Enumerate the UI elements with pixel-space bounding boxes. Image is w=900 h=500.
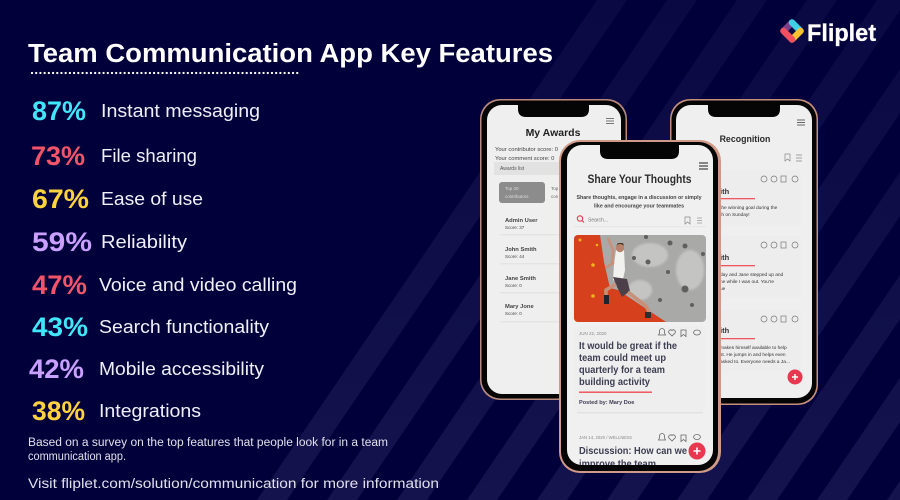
survey note: Based on a survey on the top features that people look for in a team: [28, 437, 388, 449]
feature list: [29, 96, 297, 426]
stat: mobile accessibility: 42%: [29, 354, 84, 384]
stat: instant messaging: [32, 96, 260, 126]
recognition card 2: [721, 242, 798, 290]
toolbar icons: [785, 154, 802, 161]
stat: search functionality: 43%: [32, 312, 88, 342]
button: top contributors: con: [551, 194, 559, 199]
recognition card 3: ith: [720, 326, 730, 335]
stat: file sharing: File sharing: [101, 146, 197, 166]
survey note: [28, 437, 388, 463]
stat: voice and video calling: [32, 270, 297, 300]
stat: integrations: [32, 396, 201, 426]
stat: reliability: 59%: [32, 227, 92, 257]
notch: [600, 144, 679, 159]
leaderboard: Jane Smith: [505, 276, 536, 282]
description: Share thoughts, engage in a discussion or simply: [576, 195, 702, 201]
leaderboard: Score: 44: [505, 254, 525, 259]
leaderboard: Score: 37: [505, 225, 525, 230]
stat: file sharing: 73%: [31, 141, 85, 171]
title: Team Communication App Key Features: [28, 40, 553, 68]
leaderboard: Score: 0: [505, 311, 522, 316]
stat: search functionality: [32, 312, 269, 342]
recognition card 2: ith: [720, 253, 730, 262]
post card 2: Discussion: How can we: [579, 445, 687, 457]
stat: ease of use: Ease of use: [101, 189, 203, 209]
post card: team could meet up: [579, 352, 666, 364]
phone: Share Your Thoughts: [559, 140, 721, 473]
leaderboard: Score: 0: [505, 283, 522, 288]
leaderboard: Mary Jone: [505, 304, 534, 310]
leaderboard: [500, 218, 559, 322]
leaderboard: Admin User: [505, 218, 538, 224]
screen title: My Awards: [526, 127, 581, 139]
icon: logo diamond: [784, 22, 800, 40]
screen title: Recognition: [720, 134, 770, 144]
button: add: [788, 370, 802, 384]
score text: Your comment score: 0: [495, 156, 554, 162]
recognition card 1: ith: [720, 187, 730, 196]
stat: voice and video calling: Voice and video calling: [99, 275, 297, 295]
logo: Fliplet: Fliplet: [807, 20, 876, 47]
stat: reliability: Reliability: [101, 232, 187, 252]
photo: climber on wall: [574, 235, 706, 322]
screen title: Share Your Thoughts: [588, 174, 692, 186]
stat: search functionality: Search functionality: [99, 317, 269, 337]
post card: building activity: [579, 376, 650, 388]
score text: [495, 147, 558, 160]
survey note: communication app.: [28, 451, 126, 463]
recognition card 1: th on Sunday!: [720, 212, 750, 218]
post card: It would be great if the: [579, 340, 677, 352]
phone: Recognition: [670, 99, 818, 405]
post card: Posted by: Mary Doe: [579, 400, 634, 406]
stat: mobile accessibility: Mobile accessibility: [99, 359, 264, 379]
notch: [518, 104, 589, 117]
icon: menu: [797, 120, 805, 125]
icon: menu: [606, 118, 614, 124]
description: [576, 195, 702, 210]
phone: My Awards: Awards list: [500, 166, 525, 172]
awards bar: [494, 162, 559, 175]
recognition card 1: the winning goal during the: [720, 205, 778, 211]
recognition card 2: ue: [720, 287, 726, 292]
leaderboard: John Smith: [505, 247, 537, 253]
button: top contributors: [499, 182, 559, 203]
recognition card 2: ne while I was out. You're: [720, 279, 774, 285]
search bar: Search...: [588, 218, 608, 224]
icon: menu: [699, 163, 708, 169]
recognition card 3: makes himself available to help: [720, 345, 787, 351]
stat: ease of use: [32, 184, 203, 214]
description: like and encourage your teammates: [594, 204, 684, 210]
stat: voice and video calling: 47%: [32, 270, 87, 300]
button: top contributors: contributors: [505, 194, 529, 199]
stat: integrations: Integrations: [99, 401, 201, 421]
notch: [708, 104, 780, 117]
post card: [575, 326, 705, 414]
recognition card 3: asked to. Everyone needs a Ja...: [720, 359, 790, 365]
stat: instant messaging: Instant messaging: [101, 101, 260, 121]
post card 2: [579, 433, 701, 465]
source link: Visit fliplet.com/solution/communication for more information: [28, 476, 439, 491]
recognition card 1: [721, 176, 798, 217]
post card: JUN 22, 2020: [579, 331, 607, 336]
stat: instant messaging: 87%: [32, 96, 86, 126]
stat: file sharing: [31, 141, 197, 171]
recognition card 2: day and Jane stepped up and: [720, 272, 784, 278]
phone: My Awards: [480, 99, 627, 400]
post card: quarterly for a team: [579, 364, 665, 376]
stat: reliability: [32, 227, 187, 257]
recognition card 3: [721, 316, 798, 364]
post card 2: JAN 14, 2020 / WELLNESS: [579, 435, 632, 440]
post card 2: improve the team: [579, 458, 656, 470]
search bar: [576, 215, 702, 225]
stat: ease of use: 67%: [32, 184, 89, 214]
button: top contributors: Top 20: [505, 186, 519, 191]
stat: mobile accessibility: [29, 354, 264, 384]
button: add: [688, 442, 706, 460]
button: top contributors: Top: [551, 186, 559, 191]
stat: integrations: 38%: [32, 396, 85, 426]
recognition card 3: st. He jumps in and helps even: [720, 352, 786, 358]
score text: Your contributor score: 0: [495, 147, 558, 153]
